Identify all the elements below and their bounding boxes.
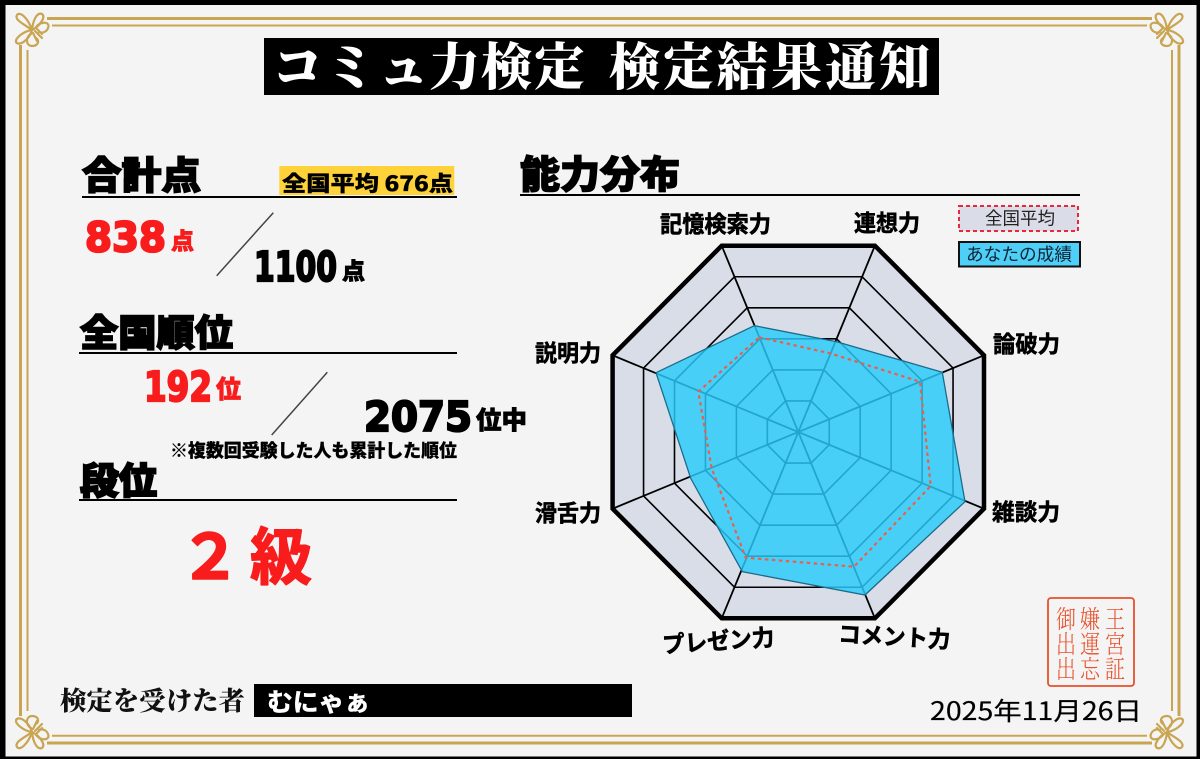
legend: your score: あなたの成績 bbox=[966, 242, 1072, 266]
seal stamp: 嫌 bbox=[1080, 600, 1100, 636]
grade value: ２級 bbox=[179, 507, 312, 597]
panel: grade bbox=[79, 451, 457, 597]
slash bbox=[272, 372, 327, 435]
seal stamp: 出 bbox=[1056, 625, 1076, 661]
total participants: 2075 bbox=[364, 393, 472, 441]
radar grid bbox=[613, 246, 984, 618]
national average polygon bbox=[698, 337, 931, 567]
score value: 838 bbox=[85, 214, 166, 262]
seal stamp: 運 bbox=[1080, 625, 1100, 661]
axis labels: 連想力 bbox=[854, 204, 920, 238]
maximum score: 1100 bbox=[254, 243, 337, 291]
heading: total score: 合計点 bbox=[82, 145, 201, 200]
legend: national average bbox=[959, 206, 1078, 231]
date: 2025年11月26日 bbox=[930, 692, 1142, 728]
seal stamp bbox=[1048, 598, 1134, 686]
axis labels: 記憶検索力 bbox=[660, 205, 771, 239]
rank note: ※複数回受験した人も累計した順位 bbox=[170, 437, 457, 463]
national average badge: 全国平均 676点 bbox=[282, 168, 453, 198]
seal stamp: 証 bbox=[1105, 650, 1125, 686]
slash bbox=[217, 213, 273, 276]
examinee name bar: むにゃぁ bbox=[267, 683, 370, 719]
seal stamp: 王 bbox=[1105, 600, 1125, 636]
radar chart bbox=[535, 204, 1060, 660]
corner ornament: bottom right bbox=[1150, 716, 1183, 748]
your score polygon bbox=[656, 326, 965, 595]
corner ornament: top right bbox=[1150, 14, 1183, 46]
panel: total score bbox=[82, 145, 457, 291]
rank value: 192 bbox=[144, 363, 212, 411]
heading: grade: 段位 bbox=[80, 451, 157, 505]
examinee label: 検定を受けた者 bbox=[60, 687, 245, 716]
axis labels: プレゼン力 bbox=[661, 618, 775, 660]
seal stamp: 宮 bbox=[1105, 625, 1125, 661]
seal stamp: 御 bbox=[1056, 600, 1076, 636]
axis labels: コメント力 bbox=[838, 615, 951, 655]
rank value: 位 bbox=[216, 370, 241, 406]
axis labels: 滑舌力 bbox=[535, 494, 601, 528]
corner ornament: bottom left bbox=[16, 716, 48, 748]
corner ornament: top left bbox=[16, 14, 48, 46]
legend: national average: 全国平均 bbox=[985, 206, 1055, 230]
axis labels: 説明力 bbox=[535, 334, 601, 368]
heading: national rank: 全国順位 bbox=[80, 303, 233, 357]
total participants: 位中 bbox=[476, 401, 527, 437]
examinee name bar bbox=[254, 683, 632, 719]
title banner: コミュ力検定検定結果通知 bbox=[272, 40, 930, 97]
score value: 点 bbox=[171, 222, 194, 256]
panel: national rank bbox=[79, 303, 527, 463]
panel heading: ability distribution: 能力分布 bbox=[520, 144, 680, 199]
maximum score: 点 bbox=[342, 252, 365, 286]
axis labels bbox=[535, 204, 1060, 660]
axis labels: 論破力 bbox=[993, 325, 1060, 359]
axis labels: 雑談力 bbox=[992, 493, 1060, 527]
seal stamp: 出 bbox=[1056, 650, 1076, 686]
seal stamp: 忘 bbox=[1080, 650, 1100, 686]
